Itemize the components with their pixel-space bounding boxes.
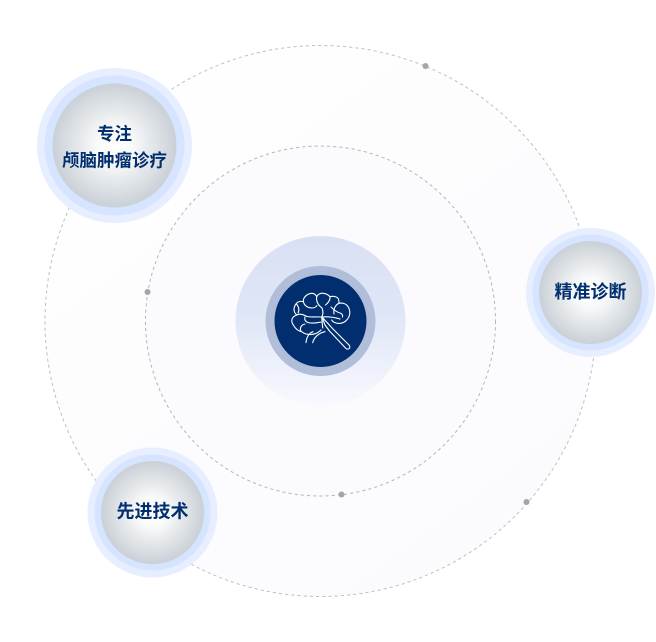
label: focus: 专注 <box>97 124 132 144</box>
panel: inner orbit <box>146 146 496 496</box>
panel: outer orbit <box>45 46 596 596</box>
node: precise diagnosis <box>526 228 655 357</box>
label: advanced technology: 先进技术 <box>116 502 188 522</box>
node: brain tumor care <box>37 68 192 223</box>
label: precise diagnosis: 精准诊断 <box>554 281 626 302</box>
label: brain tumor diagnosis and treatment: 颅脑肿瘤诊疗 <box>62 150 167 170</box>
icon: brain with scalpel <box>292 293 350 349</box>
central hub <box>236 236 406 406</box>
node: advanced technology <box>88 448 218 578</box>
orbit dots <box>144 63 530 505</box>
